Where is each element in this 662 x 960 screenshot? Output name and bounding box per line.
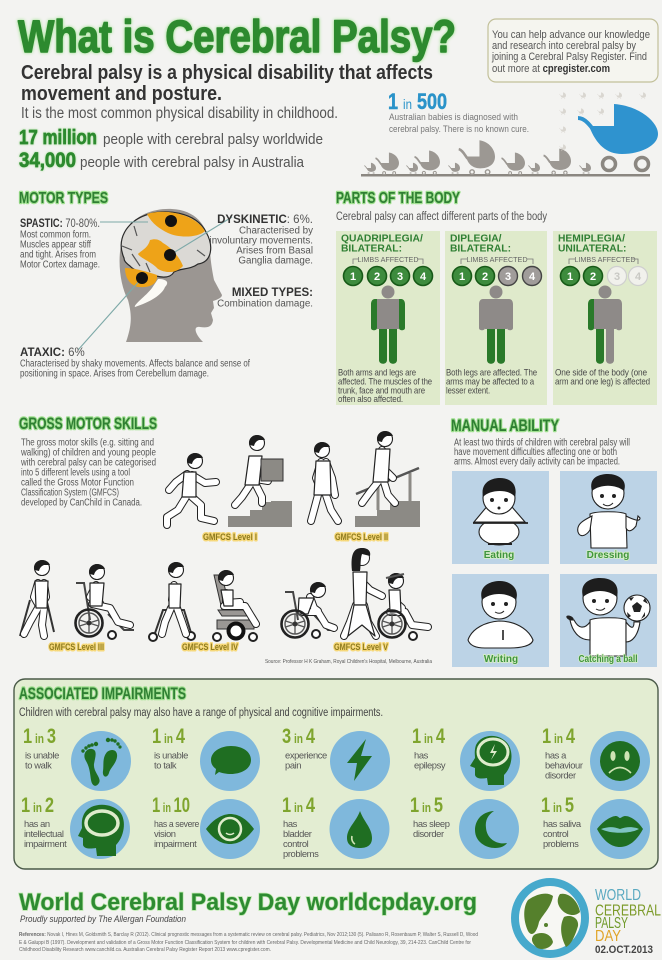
stat: unable to walk: 1 in 3 xyxy=(23,725,56,748)
panel: diplegia xyxy=(445,231,547,405)
panel: quadriplegia: QUADRIPLEGIA/ xyxy=(341,234,423,244)
intro text block: movement and posture. xyxy=(21,83,222,105)
stat: experience pain: pain xyxy=(285,760,301,770)
text: ataxic: positioning in space. Arises from Cerebellum damage. xyxy=(20,368,209,380)
panel: diplegia: 3 xyxy=(505,271,511,283)
text: spastic: Most common form. xyxy=(20,230,91,240)
panel: hemiplegia: LIMBS AFFECTED xyxy=(574,255,636,264)
pictogram: prams xyxy=(361,92,658,176)
logo text: PALSY xyxy=(595,915,628,932)
stat: behaviour disorder: 1 in 4 xyxy=(542,725,575,748)
references: E & Galuppi B (1997). Development and validation of a Gross Motor Function Classification System for children with Cerebral Palsy. Developmental Medicine and Child Neurology, 39, 214-223. CanChild Centre for xyxy=(19,940,471,946)
stat: epilepsy: epilepsy xyxy=(414,760,446,770)
stat: 1 in 500: Australian babies is diagnosed with xyxy=(389,112,518,123)
text: gross motor description: into 5 different levels using a tool xyxy=(21,468,130,478)
stat: experience pain: experience xyxy=(285,750,327,760)
panel: diplegia: arms may be affected to a xyxy=(446,376,535,386)
panel: hemiplegia: 1 xyxy=(567,271,573,283)
stat: vision impairment: 1 in 10 xyxy=(152,794,190,817)
panel: hemiplegia: HEMIPLEGIA/ xyxy=(558,234,625,244)
sponsor line: Proudly supported by The Allergan Foundation xyxy=(20,914,186,924)
illustration: child in powered chair xyxy=(213,570,257,641)
panel: writing: Writing xyxy=(484,654,518,665)
logo: World Cerebral Palsy Day xyxy=(515,882,661,956)
footer heading: World Cerebral Palsy Day worldcpday.org xyxy=(19,889,477,916)
panel: catching a ball xyxy=(560,574,657,667)
text: spastic: SPASTIC: 70-80%. xyxy=(20,218,100,230)
panel: eating xyxy=(452,471,549,564)
panel: quadriplegia: 1 xyxy=(350,271,356,283)
panel: writing xyxy=(452,574,549,667)
intro text: Children with cerebral palsy may also have a range of physical and cognitive impairments. xyxy=(19,707,383,719)
text: gross motor description: walking) of children and young people xyxy=(20,448,156,458)
text: spastic: Muscles appear stiff xyxy=(20,240,91,250)
stat: intellectual impairment: has an xyxy=(24,818,50,829)
stat: bladder control problems: 1 in 4 xyxy=(282,794,315,817)
stat: unable to talk: 1 in 4 xyxy=(152,725,185,748)
stat: epilepsy: has xyxy=(414,750,429,760)
text: dyskinetic: DYSKINETIC: 6%. xyxy=(217,214,313,226)
illustration: child with crutches xyxy=(20,560,54,636)
stat: bladder control problems xyxy=(282,794,390,859)
stat: behaviour disorder xyxy=(542,725,650,791)
panel: quadriplegia: often also affected. xyxy=(338,394,403,404)
panel: eating: Eating xyxy=(484,550,514,561)
illustration: slumped child in wheelchair xyxy=(282,582,336,638)
heading: parts of the body: Cerebral palsy can affect different parts of the body xyxy=(336,211,547,223)
label: GMFCS Level II xyxy=(335,532,388,543)
panel: catching a ball: Catching a ball xyxy=(578,654,638,665)
panel: quadriplegia: 3 xyxy=(397,271,403,283)
heading: manual ability: have movement difficulties affecting one or both xyxy=(454,447,617,458)
panel: hemiplegia xyxy=(553,231,657,405)
stat: sleep disorder: 1 in 5 xyxy=(410,794,443,817)
references: Childhood Disability Research www.canchild.ca. Australian Cerebral Palsy Register Report 2013 www.cpregister.com. xyxy=(19,947,271,953)
stat: behaviour disorder: behaviour xyxy=(545,760,583,770)
text: spastic: Motor Cortex damage. xyxy=(20,260,100,270)
stat: epilepsy: 1 in 4 xyxy=(412,725,445,748)
stat: 1 in 500: cerebral palsy. There is no known cure. xyxy=(389,124,529,135)
stat: saliva control problems: has saliva xyxy=(543,818,582,829)
stat: sleep disorder xyxy=(410,794,519,859)
panel: dressing xyxy=(560,471,657,564)
stat: saliva control problems xyxy=(541,794,650,859)
stat: intellectual impairment: 1 in 2 xyxy=(21,794,54,817)
text: gross motor description: developed by CanChild in Canada. xyxy=(21,498,142,508)
text: spastic: and tight. Arises from xyxy=(20,250,96,260)
panel: hemiplegia: One side of the body (one xyxy=(555,368,647,378)
panel: quadriplegia: BILATERAL: xyxy=(341,244,402,254)
text: spastic xyxy=(20,218,100,270)
panel: diplegia: LIMBS AFFECTED xyxy=(466,255,528,264)
stat: 1 in 500: 1 in 500 xyxy=(388,89,447,114)
panel: quadriplegia: 2 xyxy=(374,271,380,283)
stat: bladder control problems: problems xyxy=(283,848,319,859)
text: dyskinetic: Ganglia damage. xyxy=(238,256,313,266)
stat: unable to talk: to talk xyxy=(154,760,177,770)
panel: hemiplegia: 3 xyxy=(614,271,620,283)
stat: 34,000 in Australia xyxy=(19,149,305,172)
illustration: GMFCS level I xyxy=(167,435,292,543)
panel: quadriplegia: trunk, face and mouth are xyxy=(338,386,425,396)
panel: diplegia: lesser extent. xyxy=(446,386,490,396)
callout: register box: out more at cpregister.com xyxy=(492,63,610,75)
illustration: adult pushing child xyxy=(344,548,382,636)
heading: gross motor skills: GROSS MOTOR SKILLS xyxy=(19,415,157,433)
text: dyskinetic: Characterised by xyxy=(239,226,313,236)
heading: ASSOCIATED IMPAIRMENTS xyxy=(19,684,186,703)
illustration: GMFCS level II xyxy=(311,431,420,543)
panel: hemiplegia: 2 xyxy=(590,271,596,283)
illustration: GMFCS level III xyxy=(20,560,134,653)
text: mixed types xyxy=(217,287,313,310)
stat: intellectual impairment: impairment xyxy=(24,838,67,849)
text: ataxic: ATAXIC: 6% xyxy=(20,347,85,359)
panel: diplegia: DIPLEGIA/ xyxy=(450,234,502,244)
text: dyskinetic: Arises from Basal xyxy=(236,246,313,256)
stat: epilepsy xyxy=(412,725,520,791)
panel: associated impairments xyxy=(14,679,658,869)
stat: unable to talk: is unable xyxy=(154,750,188,760)
callout: register box xyxy=(488,19,658,82)
stat: vision impairment: impairment xyxy=(154,838,197,849)
text: ataxic: Characterised by shaky movements. Affects balance and sense of xyxy=(20,358,250,370)
illustration: GMFCS level IV xyxy=(149,562,257,653)
icon: globe ring xyxy=(515,882,585,954)
illustration: child in wheelchair xyxy=(76,564,134,639)
panel: hemiplegia: UNILATERAL: xyxy=(558,244,626,254)
text: dyskinetic: involuntary movements. xyxy=(210,236,313,246)
references: References: Novak I, Hines M, Goldsmith S, Barclay R (2012). Clinical prognostic messages from a systematic review on cerebral palsy. Pediatrics, Nov 2012;130 (5). Palisano R, Rosenbaum P, Walter S, Russell D, Wood xyxy=(19,932,478,938)
heading: parts of the body: PARTS OF THE BODY xyxy=(336,190,460,207)
heading: motor types: MOTOR TYPES xyxy=(19,190,108,207)
heading: manual ability: MANUAL ABILITY xyxy=(451,417,559,435)
intro text block: Cerebral palsy is a physical disability that affects xyxy=(21,62,433,84)
stat: bladder control problems: control xyxy=(283,838,309,849)
panel: quadriplegia: 4 xyxy=(420,271,427,283)
panel: diplegia: 4 xyxy=(529,271,536,283)
stat: bladder control problems: has xyxy=(283,818,298,829)
logo text: DAY xyxy=(595,928,621,945)
stat: 34,000 in Australia: people with cerebral palsy in Australia xyxy=(80,155,305,171)
diagram: head and brain xyxy=(78,209,232,350)
stat: vision impairment: vision xyxy=(154,828,176,839)
panel: quadriplegia: Both arms and legs are xyxy=(338,368,416,378)
stat: intellectual impairment xyxy=(21,794,130,859)
text: gross motor description: called the Gross Motor Function xyxy=(21,478,134,488)
stat: unable to walk xyxy=(23,725,131,791)
panel: hemiplegia: 4 xyxy=(635,271,642,283)
illustration: GMFCS level V xyxy=(282,548,428,653)
panel: quadriplegia xyxy=(336,231,440,405)
panel: quadriplegia: affected. The muscles of the xyxy=(338,376,432,386)
stat: vision impairment xyxy=(152,794,260,859)
stat: saliva control problems: control xyxy=(543,828,569,839)
stat: saliva control problems: problems xyxy=(543,838,579,849)
stat: 34,000 in Australia: 34,000 xyxy=(19,149,76,172)
panel: diplegia: 1 xyxy=(459,271,465,283)
panel: diplegia: BILATERAL: xyxy=(450,244,511,254)
stat: experience pain: 3 in 4 xyxy=(282,725,315,748)
stat: unable to walk: is unable xyxy=(25,750,59,760)
logo text: WORLD xyxy=(595,887,641,904)
panel: diplegia: Both legs are affected. The xyxy=(446,368,537,378)
stat: sleep disorder: has sleep xyxy=(413,818,450,829)
stat: intellectual impairment: intellectual xyxy=(24,828,64,839)
illustration: child on stairs with rail xyxy=(355,431,420,527)
stat: sleep disorder: disorder xyxy=(413,828,444,839)
panel: dressing: Dressing xyxy=(587,550,629,561)
logo text: 02.OCT.2013 xyxy=(595,944,653,956)
stat: 1 in 500 xyxy=(388,89,529,135)
heading: parts of the body xyxy=(336,190,547,223)
intro text block: It is the most common physical disability in childhood. xyxy=(21,105,338,122)
text: mixed types: MIXED TYPES: xyxy=(232,287,313,299)
text: ataxic xyxy=(20,347,250,380)
references xyxy=(19,932,478,953)
stat: vision impairment: has a severe xyxy=(154,818,199,829)
stat: experience pain xyxy=(282,725,390,791)
text: dyskinetic xyxy=(210,214,313,266)
text: gross motor description: The gross motor skills (e.g. sitting and xyxy=(21,438,154,448)
stat: behaviour disorder: disorder xyxy=(545,770,576,780)
stat: 17 million worldwide: people with cerebral palsy worldwide xyxy=(103,132,323,148)
intro text block xyxy=(21,62,433,122)
illustration: child with walker xyxy=(149,562,195,641)
illustration: running child xyxy=(167,453,216,525)
illustration: child carrying box on stairs xyxy=(228,435,292,527)
heading: manual ability xyxy=(451,417,630,468)
label: GMFCS Level I xyxy=(203,532,257,543)
text: gross motor description: Classification System (GMFCS) xyxy=(21,488,119,498)
stat: saliva control problems: 1 in 5 xyxy=(541,794,574,817)
stat: 17 million worldwide: 17 million xyxy=(19,126,97,149)
source note: Source: Professor H K Graham, Royal Children's Hospital, Melbourne, Australia xyxy=(265,659,432,665)
stat: behaviour disorder: has a xyxy=(545,750,567,760)
label: GMFCS Level III xyxy=(49,642,104,653)
label: GMFCS Level V xyxy=(334,642,389,653)
illustration: child in wheelchair with headrest xyxy=(378,573,428,640)
icon: football xyxy=(624,595,650,621)
callout: register box: and research into cerebral palsy by xyxy=(492,40,637,52)
text: mixed types: Combination damage. xyxy=(217,298,313,310)
panel: quadriplegia: LIMBS AFFECTED xyxy=(357,255,419,264)
logo text xyxy=(595,887,661,956)
illustration: walking child xyxy=(311,442,338,521)
stat: unable to talk xyxy=(152,725,260,791)
stat: 17 million worldwide xyxy=(19,126,323,149)
title: What is Cerebral Palsy? xyxy=(18,11,456,62)
panel: diplegia: 2 xyxy=(482,271,488,283)
label: GMFCS Level IV xyxy=(182,642,239,653)
text: gross motor description: with cerebral palsy can be categorised xyxy=(20,458,156,468)
stat: unable to walk: to walk xyxy=(25,760,52,770)
text: gross motor description xyxy=(20,438,156,508)
stat: bladder control problems: bladder xyxy=(283,828,312,839)
